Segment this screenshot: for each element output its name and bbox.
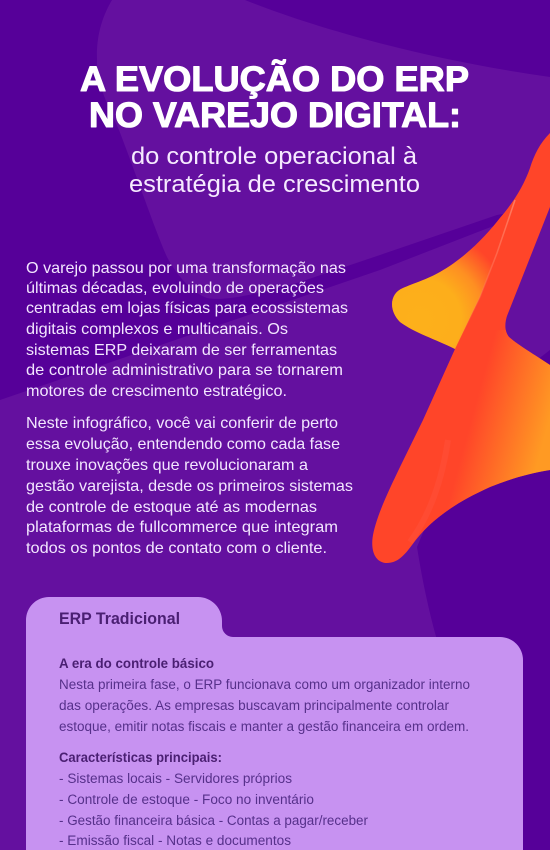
section: características principais (59, 750, 368, 848)
intro paragraph 1: O varejo passou por uma transformação nas (26, 260, 346, 277)
intro paragraph 2: de controle de estoque até as modernas (26, 499, 317, 516)
section: a era do controle básico: estoque, emitir notas fiscais e manter a gestão financeira em ordem. (59, 719, 469, 734)
title: A EVOLUÇÃO DO ERP (80, 60, 469, 99)
card shape with tab (26, 597, 523, 850)
title: NO VAREJO DIGITAL: (89, 96, 461, 135)
flame illustration (370, 130, 550, 565)
intro paragraph 1 (26, 260, 348, 400)
subtitle: estratégia de crescimento (129, 171, 420, 198)
intro paragraph 2: Neste infográfico, você vai conferir de perto (26, 415, 338, 432)
card heading: ERP Tradicional (59, 609, 180, 628)
section: características principais: - Emissão fiscal - Notas e documentos (59, 833, 291, 848)
intro paragraph 2: gestão varejista, desde os primeiros sistemas (26, 478, 353, 495)
section: a era do controle básico: das operações. As empresas buscavam principalmente controlar (59, 698, 450, 713)
section: características principais: Características principais: (59, 750, 222, 765)
subtitle (129, 143, 420, 198)
intro paragraph 2: trouxe inovações que revolucionaram a (26, 457, 308, 474)
section: características principais: - Gestão financeira básica - Contas a pagar/receber (59, 813, 368, 828)
intro paragraph 2: todos os pontos de contato com o cliente. (26, 540, 327, 557)
section: a era do controle básico: A era do controle básico (59, 656, 214, 671)
subtitle: do controle operacional à (131, 143, 418, 170)
intro paragraph 2: essa evolução, entendendo como cada fase (26, 436, 340, 453)
intro paragraph 1: de controle administrativo para se tornarem (26, 362, 343, 379)
intro paragraph 1: sistemas ERP deixaram de ser ferramentas (26, 342, 337, 359)
section: características principais: - Sistemas locais - Servidores próprios (59, 771, 292, 786)
intro paragraph 1: digitais complexos e multicanais. Os (26, 321, 288, 338)
section: a era do controle básico: Nesta primeira fase, o ERP funcionava como um organizador interno (59, 677, 470, 692)
panel: ERP Tradicional (26, 597, 523, 850)
intro paragraph 2: plataformas de fullcommerce que integram (26, 519, 338, 536)
title (80, 60, 469, 135)
section: características principais: - Controle de estoque - Foco no inventário (59, 792, 314, 807)
section: a era do controle básico (59, 656, 470, 734)
intro paragraph 1: centradas em lojas físicas para ecossistemas (26, 300, 348, 317)
intro paragraph 2 (26, 415, 353, 557)
intro paragraph 1: últimas décadas, evoluindo de operações (26, 280, 324, 297)
intro paragraph 1: motores de crescimento estratégico. (26, 383, 287, 400)
